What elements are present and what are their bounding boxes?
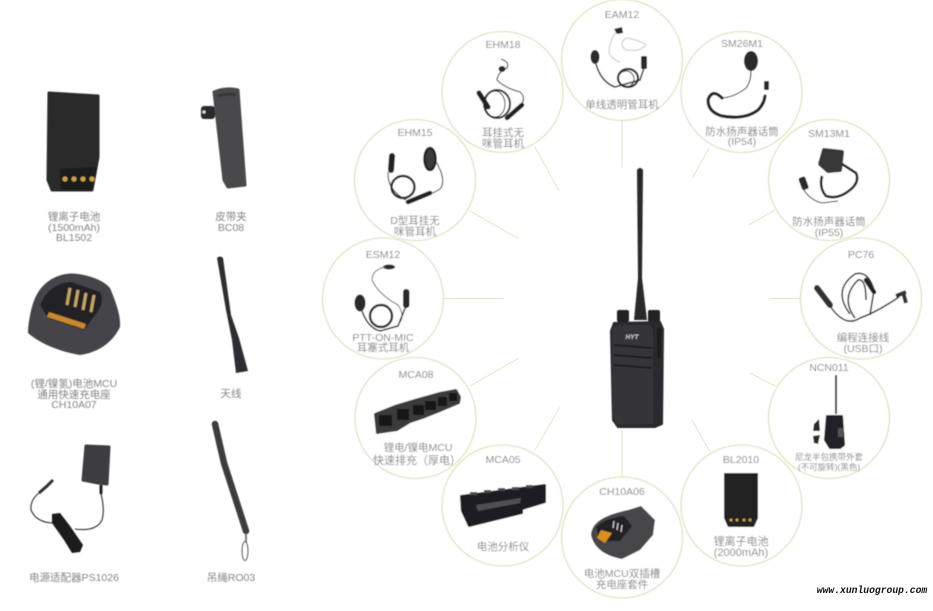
panel: EAM12: EAM12: [605, 9, 639, 21]
panel: EHM18: EHM18: [485, 39, 521, 51]
panel: MCA05: 电池分析仪: [477, 540, 530, 553]
panel: MCA08: MCA08: [398, 369, 434, 381]
panel: PC76: PC76: [848, 249, 874, 261]
panel: BL1502 battery: 锂离子电池: [48, 210, 101, 223]
panel: EHM15: EHM15: [397, 127, 433, 139]
panel: MCA05: [442, 445, 563, 566]
panel: MCA08: 锂电/镍电MCU: [384, 441, 452, 454]
panel: MCA08: [355, 358, 476, 478]
panel: BL2010: (2000mAh): [714, 547, 768, 559]
panel: ESM12: ESM12: [366, 249, 400, 261]
panel: BC08 belt clip: 皮带夹: [215, 210, 247, 223]
panel: EHM15: [354, 120, 476, 240]
panel: ESM12: [322, 238, 444, 359]
panel: EHM18: [442, 32, 563, 152]
panel: SM26M1: (IP54): [728, 136, 756, 148]
panel: PS1026 power adapter: [29, 446, 119, 584]
panel: SM26M1: SM26M1: [721, 38, 763, 50]
panel: SM26M1: 防水扬声器话筒: [705, 125, 779, 138]
watermark: www.xunluogroup.com: [817, 585, 927, 596]
panel: PS1026 power adapter: 电源适配器PS1026: [29, 571, 119, 584]
panel: BL1502 battery: BL1502: [56, 232, 92, 244]
panel: EHM18: 咪管耳机: [482, 137, 524, 150]
panel: EAM12: 单线透明管耳机: [585, 98, 659, 111]
panel: EHM15: 咪管耳机: [394, 225, 436, 238]
panel: NCN011: (不可旋转)(黑色): [798, 462, 860, 472]
panel: BL2010: 锂离子电池: [714, 534, 768, 548]
panel: antenna: 天线: [220, 387, 242, 400]
panel: CH10A07 charger: [28, 274, 120, 411]
panel: SM13M1: (IP55): [815, 227, 843, 239]
panel: CH10A07 charger: CH10A07: [51, 399, 97, 411]
panel: RO03 strap: [207, 424, 255, 584]
panel: NCN011: NCN011: [809, 362, 849, 374]
panel: SM13M1: 防水扬声器话筒: [792, 215, 866, 228]
panel: PC76: [800, 238, 922, 359]
panel: BL2010: [681, 445, 802, 566]
panel: ESM12: 耳塞式耳机: [357, 341, 410, 354]
panel: EHM18: 耳挂式无: [482, 126, 524, 139]
central radio: [611, 168, 663, 427]
panel: SM13M1: SM13M1: [808, 128, 850, 140]
panel: BL1502 battery: (1500mAh): [48, 222, 100, 234]
panel: RO03 strap: 吊绳RO03: [207, 571, 255, 584]
central radio: HYT: [626, 334, 640, 341]
panel: PC76: (USB口): [843, 343, 883, 355]
panel: MCA05: MCA05: [485, 454, 521, 466]
panel: NCN011: [768, 358, 890, 478]
panel: CH10A07 charger: 通用快速充电座: [37, 388, 111, 401]
panel: SM26M1: [681, 32, 802, 152]
panel: CH10A06: [562, 477, 682, 598]
panel: MCA08: 快速排充（厚电）: [373, 453, 461, 467]
panel: CH10A06: CH10A06: [599, 486, 645, 498]
connector lines from radio to accessories: [444, 120, 800, 477]
panel: BL2010: BL2010: [723, 454, 759, 466]
panel: BC08 belt clip: BC08: [218, 222, 244, 234]
panel: EAM12: [562, 0, 682, 120]
panel: CH10A06: 电池MCU双插槽: [584, 567, 661, 580]
panel: EHM15: D型耳挂无: [390, 214, 440, 227]
panel: BL1502 battery: [48, 93, 101, 244]
panel: CH10A07 charger: (锂/镍氢)电池MCU: [31, 377, 117, 390]
panel: CH10A06: 充电座套件: [596, 578, 648, 591]
panel: PC76: 编程连接线: [837, 331, 890, 344]
panel: SM13M1: [768, 120, 890, 240]
panel: ESM12: PTT-ON-MIC: [352, 332, 414, 344]
panel: antenna: [217, 256, 248, 400]
panel: NCN011: 尼龙半包携带外套: [795, 452, 863, 462]
panel: BC08 belt clip: [201, 89, 247, 234]
